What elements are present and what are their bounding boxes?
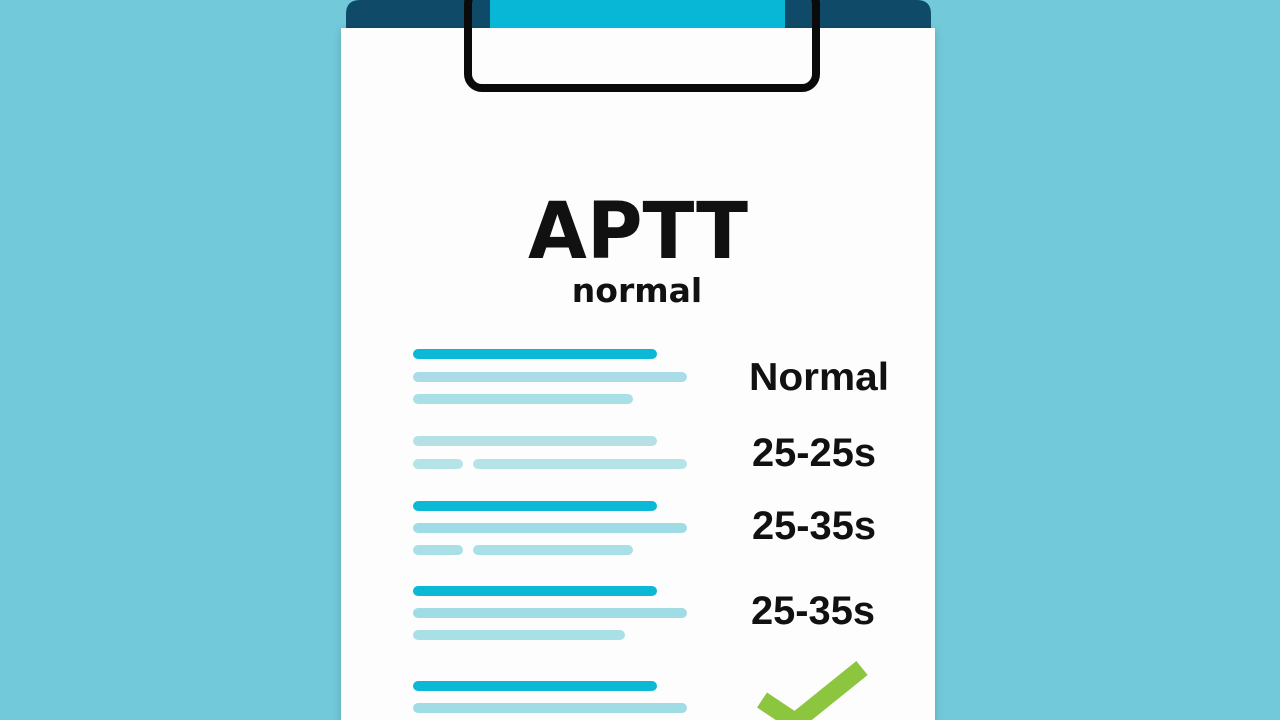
- placeholder text lines: [418, 354, 682, 708]
- subtitle: normal: [572, 271, 702, 310]
- paper sheet: [341, 28, 935, 720]
- value: 25-25s: 25-25s: [752, 431, 876, 475]
- value: 25-35s: 25-35s: [752, 504, 876, 548]
- clip: [468, 0, 816, 88]
- value: Normal: Normal: [749, 356, 889, 399]
- icon: check mark: [762, 668, 862, 720]
- title: APTT: [528, 187, 748, 277]
- value: 25-35s second: 25-35s: [751, 589, 875, 633]
- clipboard board: [346, 0, 931, 40]
